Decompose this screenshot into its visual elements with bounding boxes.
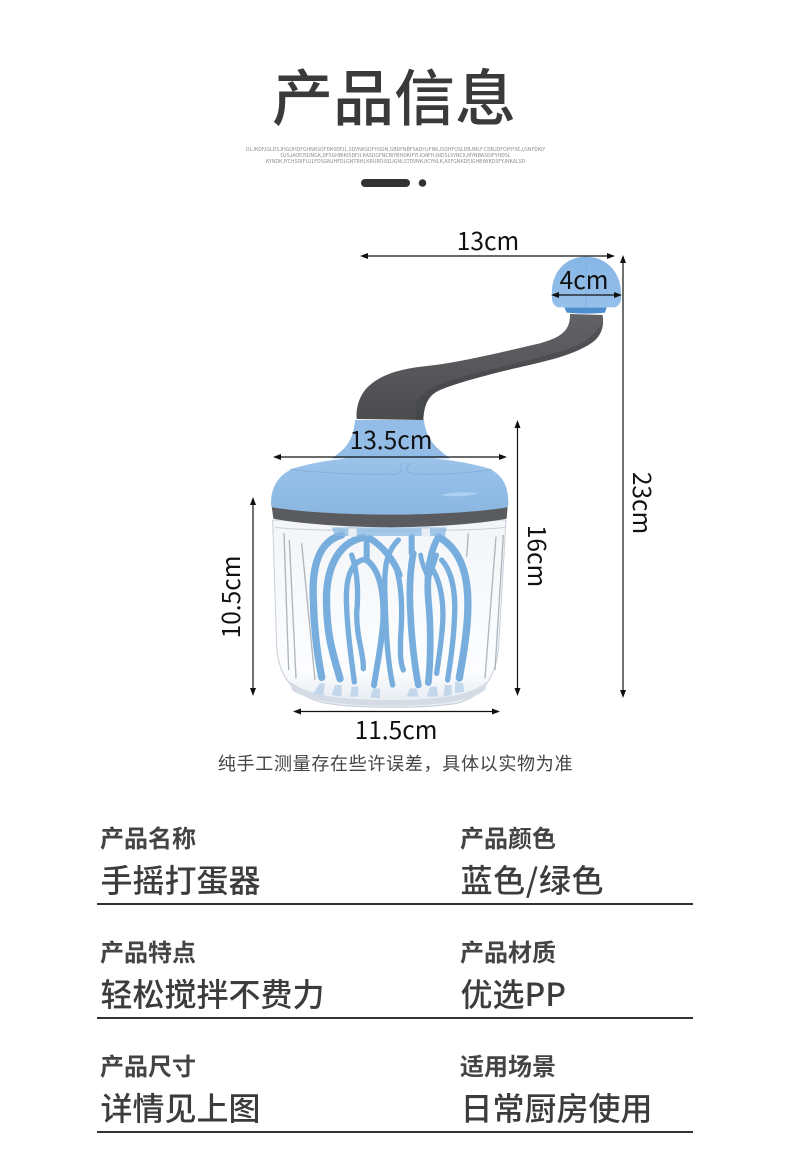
product feature: 轻松搅拌不费力 (100, 970, 325, 1016)
info row 2 (97, 933, 693, 1019)
lid neck (332, 420, 450, 458)
dimension: 10.500cm: 10.5cm (213, 556, 248, 638)
dimension: 10.500cm (213, 497, 256, 696)
dimension: 13cm (360, 223, 615, 259)
product size: 详情见上图 (100, 1084, 261, 1130)
product colour (460, 819, 604, 902)
info row 3 (97, 1047, 693, 1133)
usage scene (460, 1047, 653, 1130)
product size: 产品尺寸 (100, 1047, 196, 1082)
product colour: 蓝色/绿色 (460, 856, 604, 902)
product colour: 产品颜色 (460, 819, 556, 854)
product size (100, 1047, 261, 1130)
product name: 产品名称 (100, 819, 196, 854)
decorative pill and dot (361, 179, 426, 187)
subtitle small text: OLJKDFJGLDSJHGOHDFGHNKSDFDKSDFJL,SDVNKSDFHSDN,GBDFNBFSADHJFNKJSDHFOSLDBJMLF.CDBJDFOIFPSEJ,GNFDKIY (246, 146, 546, 153)
product feature: 产品特点 (100, 933, 196, 968)
dimension: 13.5cm: 13.5cm (350, 422, 432, 457)
title: 产品信息 (272, 49, 516, 138)
whisk strands (313, 535, 468, 685)
dimension: 4cm: 4cm (560, 262, 608, 297)
dimension: 11.500cm (293, 708, 500, 747)
info row 1 (97, 819, 693, 905)
product: hand-crank egg beater (271, 257, 621, 707)
measurement note: 纯手工测量存在些许误差，具体以实物为准 (218, 750, 573, 776)
lid (271, 457, 508, 515)
dark band (272, 506, 508, 527)
product feature (100, 933, 325, 1016)
dimension: 13cm: 13cm (457, 223, 519, 258)
subtitle small text: OJSJAOFJSDNGK,DFSGHBIKISDFJLKASDGFNCBIYBHDKIFYIJOAFHJNDSLSYNCX,MYNBASDIFYHDSL (280, 152, 511, 159)
product name (100, 819, 261, 902)
jar, lid and whisk (271, 420, 508, 707)
dimension: 13.5cm (273, 422, 507, 460)
dimension: 23cm (620, 255, 660, 698)
subtitle small text (246, 146, 546, 165)
product material: 优选PP (460, 970, 566, 1016)
usage scene: 日常厨房使用 (460, 1084, 653, 1130)
product material: 产品材质 (460, 933, 556, 968)
crank knob and handle (357, 257, 621, 420)
dimension: 4cm (551, 262, 622, 298)
dimension: 16cm (514, 420, 555, 696)
product name: 手摇打蛋器 (100, 856, 261, 902)
subtitle small text: KYNDKJYCHSDIFUJLFDSGNJHFDLGNTRHLKRUROISDJGNLSTDVNKJICYNLK,ASFGNKDFJGHBIWKDSFYJNKALSD (266, 158, 526, 165)
dimension: 23cm: 23cm (625, 472, 660, 534)
product material (460, 933, 566, 1016)
dimension: 11.500cm: 11.5cm (355, 712, 437, 747)
dimension: 16cm: 16cm (520, 525, 555, 587)
transparent jar (273, 520, 506, 707)
usage scene: 适用场景 (460, 1047, 556, 1082)
